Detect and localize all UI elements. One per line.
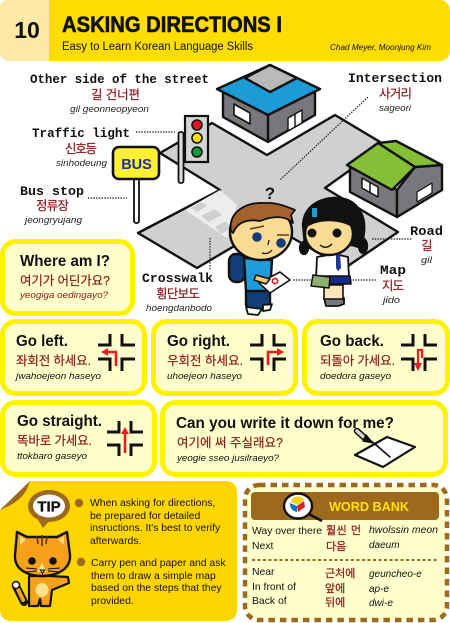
tip text 2: them to draw a simple map [91, 571, 216, 582]
label: intersection: 사거리 [379, 87, 412, 101]
label: crosswalk: Crosswalk [142, 271, 213, 286]
vocabulary row: next: daeum [369, 540, 400, 551]
girl face [308, 208, 342, 247]
label: intersection [348, 71, 442, 114]
tip text 2: provided. [91, 596, 134, 607]
word bank header [251, 492, 439, 520]
label: map [380, 263, 406, 306]
tip speech bubble [28, 490, 70, 528]
label: crosswalk: 횡단보도 [156, 287, 200, 301]
vocabulary row: way over there [252, 524, 438, 537]
question mark: ? [265, 184, 275, 203]
label: other side of the street: Other side of the street [30, 72, 209, 87]
label: other side of the street: 길 건너편 [91, 88, 140, 102]
panel: where am I [2, 242, 132, 314]
label: bus stop: jeongryujang [23, 215, 83, 226]
road intersection [138, 115, 398, 268]
icon: go straight [107, 421, 143, 456]
panel: go left: Go left. [16, 333, 68, 350]
house: blue roof [217, 65, 320, 142]
authors: Chad Meyer, Moonjung Kim [330, 42, 431, 52]
tip text 2: based on the steps that they [91, 583, 222, 594]
boy face [250, 226, 289, 254]
vocabulary row: back of: dwi-e [369, 598, 393, 609]
tip text 1: afterwards. [90, 536, 141, 547]
label: other side of the street [30, 72, 209, 115]
label: road: Road [410, 224, 443, 239]
panel: go right [154, 322, 296, 394]
icon: turn right [250, 334, 286, 371]
label: traffic light [32, 126, 130, 169]
tip text 1: When asking for directions, [90, 498, 215, 509]
label: road: 길 [421, 239, 433, 253]
panel: can you write it down: yeogie sseo jusilraeyo? [176, 453, 280, 464]
panel: where am I: Where am I? [20, 253, 110, 270]
boy character [229, 203, 295, 315]
lesson number: 10 [14, 17, 40, 43]
panel: where am I: yeogiga oedingayo? [19, 290, 109, 301]
icon: cat mascot [12, 532, 70, 606]
panel: go back: 되돌아 가세요. [320, 354, 395, 368]
vocabulary row: near: geuncheo-e [369, 569, 422, 580]
icon: fan [284, 494, 322, 521]
panel: go right: 우회전 하세요. [167, 354, 243, 368]
label: road [410, 224, 443, 266]
bullet 1 [75, 499, 83, 507]
label: bus stop: Bus stop [20, 184, 84, 199]
tip text 1: insructions. It's best to verify [90, 523, 221, 534]
folded corner [0, 481, 30, 510]
vocabulary row: in front of: In front of [252, 582, 296, 593]
vocabulary row: next [252, 540, 400, 553]
label: intersection: Intersection [348, 71, 442, 86]
tip text 2: Carry pen and paper and ask [91, 558, 226, 569]
vocabulary row: next: 다음 [326, 540, 346, 553]
vocabulary row: in front of [252, 582, 389, 595]
vocabulary row: near: 근처에 [325, 567, 355, 580]
vocabulary row: way over there: hwolssin meon [369, 525, 438, 536]
panel: go back [304, 322, 448, 394]
vocabulary row: way over there: Way over there [252, 526, 322, 537]
panel: go back: Go back. [320, 333, 384, 350]
label: crosswalk [142, 271, 213, 314]
label: traffic light: Traffic light [32, 126, 130, 141]
panel: can you write it down: Can you write it down for me? [176, 415, 394, 432]
label: bus stop [20, 184, 84, 226]
word bank title: WORD BANK [329, 500, 409, 514]
panel: go straight: Go straight. [17, 413, 102, 430]
label: map: Map [380, 263, 406, 278]
label: intersection: sageori [379, 103, 412, 114]
panel: go left: jwahoejeon haseyo [14, 371, 101, 382]
label: other side of the street: gil geonneopyeon [70, 104, 149, 115]
vocabulary row: in front of: 앞에 [325, 582, 345, 595]
panel: can you write it down [162, 402, 446, 474]
vocabulary row: near: Near [252, 567, 275, 578]
girl character [300, 198, 367, 306]
vocabulary row: back of: 뒤에 [325, 596, 345, 609]
panel: word bank [245, 485, 447, 620]
panel: go left [2, 322, 144, 394]
dotted leader lines [88, 97, 412, 280]
vocabulary row: in front of: ap-e [369, 584, 389, 595]
panel: go straight: ttokbaro gaseyo [17, 451, 87, 462]
icon: turn left [98, 334, 135, 371]
panel: where am I: 여기가 어딘가요? [20, 274, 110, 288]
label: traffic light: sinhodeung [56, 158, 108, 169]
panel: tip [0, 481, 237, 621]
panel: can you write it down: 여기에 써 주실래요? [177, 436, 283, 450]
label: crosswalk: hoengdanbodo [146, 303, 212, 314]
subtitle: Easy to Learn Korean Language Skills [62, 41, 253, 53]
bullet 2 [77, 558, 85, 566]
crosswalk [185, 190, 237, 238]
label: map: jido [381, 295, 400, 306]
panel: go straight [2, 402, 154, 474]
house: green roof [347, 141, 442, 217]
vocabulary row: back of [252, 596, 393, 609]
panel: go right: Go right. [167, 333, 230, 350]
panel: go right: uhoejeon haseyo [167, 371, 242, 382]
title: ASKING DIRECTIONS I [62, 12, 282, 37]
header banner [0, 0, 450, 61]
panel: go straight: 똑바로 가세요. [17, 434, 92, 448]
label: bus stop: 정류장 [36, 199, 69, 213]
traffic light [178, 116, 208, 183]
label: traffic light: 신호등 [65, 142, 97, 156]
label: map: 지도 [382, 279, 404, 293]
tip speech bubble: TIP [37, 498, 61, 516]
vocabulary row: next: Next [252, 541, 273, 552]
label: road: gil [421, 255, 433, 266]
vocabulary row: back of: Back of [252, 596, 287, 607]
panel: go left: 좌회전 하세요. [16, 354, 91, 368]
vocabulary row: near [252, 567, 422, 580]
tip text 1: be prepared for detailed [90, 511, 201, 522]
icon: turn back [401, 334, 437, 371]
icon: pen and paper [355, 431, 415, 467]
bus stop sign [113, 147, 159, 223]
vocabulary row: way over there: 훨씬 먼 [326, 524, 361, 537]
panel: go back: doedora gaseyo [320, 371, 391, 382]
bus stop sign: BUS [121, 157, 152, 173]
